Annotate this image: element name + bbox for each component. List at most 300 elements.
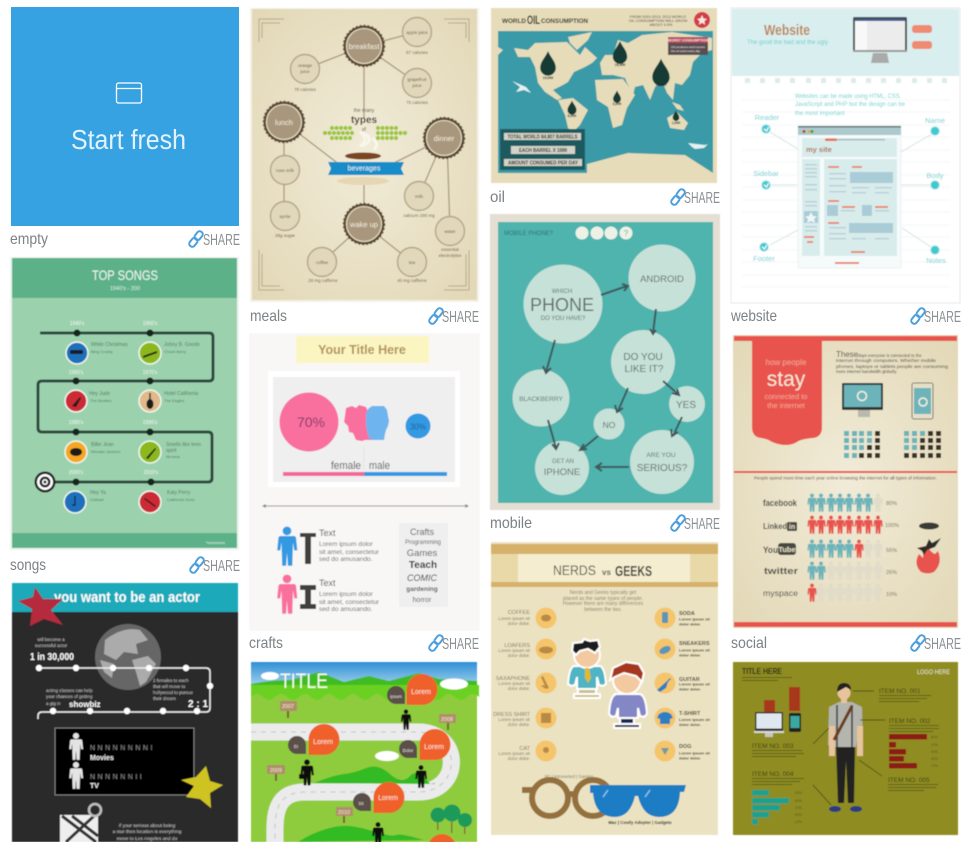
timeline dots and years: 1980's: [69, 420, 84, 426]
figures and lorem text: Text: [319, 528, 336, 538]
small drink circles: [270, 18, 464, 283]
red bar chart: 80%: [931, 736, 938, 740]
black box: movies and tv: [55, 728, 194, 795]
timeline dots and years: 1950's: [143, 321, 158, 327]
teal bar chart: 50%: [795, 813, 802, 817]
figures and lorem text: sit amet, consectetur: [319, 549, 380, 556]
year signs: [267, 701, 456, 823]
item headings and text: ITEM NO. 005: [888, 777, 930, 784]
road: [251, 732, 451, 842]
teal bar chart: [752, 790, 802, 824]
caption: meals: SHARE: [442, 309, 479, 326]
intro text: Nerds and Geeks typically get: [570, 590, 637, 596]
actor stats text: hollywood to pursue: [153, 690, 194, 695]
song captions: Hey Ya: [90, 490, 106, 496]
centre title and beverage cup: types: [351, 115, 377, 126]
red banner: stay: [767, 368, 806, 391]
lorem bubbles: Sit: [358, 801, 364, 806]
caption: crafts: [249, 634, 479, 653]
left item labels: dolor dolor.: [508, 653, 530, 658]
small drink circles: juice: [411, 83, 422, 88]
world map: [498, 32, 713, 173]
social logos: twitter: [764, 566, 798, 577]
heading: actor: you want to be an actor: [54, 589, 200, 606]
song captions: California Gurls: [167, 497, 195, 502]
caption: crafts: crafts: [249, 635, 283, 652]
song captions: Johny B. Goode: [164, 342, 200, 348]
year signs: 2009: [270, 768, 282, 774]
lorem bubbles: Lorem: [411, 689, 431, 696]
right item labels: [679, 611, 711, 760]
percentages: 80%: [886, 501, 897, 507]
callout labels: Footer: [753, 254, 775, 263]
teal bar chart: 80%: [795, 799, 802, 803]
panel: songs: [10, 257, 239, 550]
dotted route: [36, 665, 213, 719]
flowchart circles: [512, 244, 705, 495]
actor location text: if your serious about being: [119, 823, 175, 829]
panel: oil: 19,000: [543, 76, 553, 80]
intro paragraph: the most important: [795, 111, 845, 117]
heading: title: TITLE: [280, 670, 328, 693]
caption: social: social: [731, 635, 767, 652]
black box: movies and tv: NNNNNNNNI: [90, 745, 155, 752]
right item labels: Lorem ipsum sit: [679, 648, 711, 652]
blue sunglasses: [590, 785, 686, 817]
right item labels: GUITAR: [679, 677, 700, 683]
right item labels: DOG: [679, 744, 692, 750]
left item labels: Lorem ipsum sit: [498, 648, 531, 653]
figures and lorem text: Lorem ipsum dolor: [319, 591, 374, 598]
caption: oil: oil: [490, 189, 505, 206]
left item labels: [493, 610, 531, 761]
small drink circles: 87 calories: [406, 50, 429, 55]
flowchart labels: PHONE: [530, 295, 594, 315]
small drink circles: apple juice: [406, 30, 428, 35]
red banner: the internet: [767, 401, 806, 410]
left item labels: LOAFERS: [504, 643, 530, 649]
word cloud: Teach: [409, 560, 437, 571]
word cloud: Crafts: [410, 527, 434, 537]
actor stats text: successful actor: [35, 643, 68, 648]
nerd character: [568, 639, 606, 698]
red bar chart: 70%: [931, 764, 938, 768]
caption: mobile: mobile: [490, 515, 532, 532]
man figure: [828, 683, 863, 812]
song captions: The Beatles: [90, 398, 111, 403]
right item labels: dolor dolor.: [679, 722, 701, 727]
percentages: 26%: [886, 570, 897, 576]
word cloud: Games: [407, 548, 438, 559]
teal bar chart: 10%: [795, 820, 802, 824]
lorem bubbles: Lorem: [313, 739, 333, 746]
browser wireframe: my site: [806, 145, 832, 154]
gender chart: male: [369, 460, 390, 472]
song captions: Hotel California: [164, 391, 198, 397]
tags: [912, 25, 932, 49]
panel: songs: *resources: [206, 540, 225, 545]
devices: [842, 383, 933, 419]
small drink circles: 28 mg caffeine: [308, 278, 338, 283]
right item labels: dolor dolor.: [679, 686, 701, 692]
total stats box: TOTAL WORLD 84,807 BARRELS: [508, 134, 578, 140]
callout labels: Sidebar: [753, 169, 779, 178]
icon: window: [116, 83, 142, 103]
badge: worst consumption: US produces and imports: [671, 45, 705, 49]
lorem bubbles: ipsum: [390, 694, 402, 699]
callout labels: Notes: [926, 256, 946, 265]
panel: website: [731, 8, 960, 303]
small drink circles: 28g sugar: [275, 233, 296, 238]
word cloud: horror: [413, 597, 432, 604]
actor stats text: [30, 637, 208, 710]
caption: website: [730, 307, 961, 326]
word cloud: gardening: [406, 586, 438, 593]
black box: movies and tv: NNNNNNII: [90, 774, 144, 781]
left item labels: COFFEE: [508, 610, 530, 616]
total stats box: [500, 129, 585, 170]
stats intro: People spend more time each year online browsing the internet for all types of information.: [754, 476, 937, 480]
actor stats text: your chances of getting: [46, 694, 93, 699]
song captions: Hey Jude: [89, 391, 110, 397]
panel: meals: [250, 8, 479, 302]
actor stats text: 2 : 1: [188, 699, 208, 710]
timeline dots and years: 2000's: [69, 470, 84, 476]
percentages: 100%: [885, 523, 899, 529]
item headings and text: ITEM NO. 002: [889, 718, 931, 725]
caption: meals: [250, 307, 479, 326]
caption: website: website: [730, 308, 777, 325]
actor location text: a star then location is everything: [113, 829, 182, 835]
red bar chart: 10%: [931, 743, 938, 747]
figures and lorem text: [277, 527, 380, 614]
title banner: [296, 336, 429, 363]
actor stats text: will become a: [37, 637, 65, 642]
right item labels: Lorem ipsum sit: [679, 682, 711, 686]
social logos: in: [789, 524, 795, 531]
intro paragraph: [836, 350, 949, 374]
badge: worst consumption: WORST CONSUMPTION: [668, 38, 709, 42]
total stats box: AMOUNT CONSUMED PER DAY: [508, 160, 578, 166]
caption: empty: empty: [10, 231, 48, 248]
right item labels: Lorem ipsum sit: [679, 616, 711, 622]
song captions: spirit: [166, 448, 177, 454]
small drink circles: grapefruit: [407, 77, 427, 82]
icon: red star: [18, 587, 63, 626]
flowchart labels: SERIOUS?: [637, 463, 688, 474]
caption: meals: meals: [250, 308, 287, 325]
social logos: [763, 498, 799, 598]
song captions: Smells like teen: [166, 442, 201, 448]
panel: oil: 3,000: [613, 102, 621, 106]
red banner: [752, 341, 822, 445]
caption: songs: SHARE: [203, 558, 240, 575]
small drink circles: electrolytes: [439, 253, 462, 258]
left item labels: dolor dolor.: [508, 756, 530, 761]
flowchart labels: LIKE IT?: [625, 364, 664, 375]
mobile header: MOBILE PHONE?: [504, 231, 554, 237]
intro paragraph: days everyone is connected to the: [858, 353, 922, 358]
song captions: Outkast: [90, 497, 105, 502]
actor stats text: showbiz: [69, 700, 101, 709]
intro paragraph: These: [836, 350, 859, 359]
caption: oil: [490, 188, 720, 207]
right item labels: dolor dolor.: [679, 622, 701, 626]
left item labels: SAXAPHONE: [496, 676, 530, 682]
heading: website: The good the bad and the ugly: [747, 39, 829, 46]
left item labels: dolor dolor.: [508, 686, 530, 691]
small drink circles: 75 calories: [406, 100, 429, 105]
social logos: myspace: [763, 589, 799, 598]
figures and lorem text: sed do amusando.: [319, 606, 373, 613]
left item labels: dolor dolor.: [508, 722, 530, 727]
logo text: LOGO HERE: [917, 669, 951, 676]
panel: oil: ABOUT 0.9%: [650, 23, 673, 27]
small drink circles: sprite: [279, 214, 291, 219]
left item labels: dolor dolor.: [508, 621, 530, 626]
timeline dots and years: 2010's: [144, 470, 159, 476]
panel: crafts: [250, 334, 479, 630]
planes: [512, 81, 708, 149]
lorem bubbles: Lorem: [424, 744, 444, 751]
big meal circles: breakfast: [349, 42, 380, 51]
panel: oil: FROM 2010-2013, 2013 WORLD: [630, 15, 686, 19]
target icon: [34, 472, 56, 492]
panel: songs: 1940's - 200: [110, 286, 140, 292]
social logos: Linked: [763, 521, 787, 531]
panel: actor: [12, 583, 238, 842]
panel: mobile: [490, 214, 720, 510]
faint ruled lines: [742, 100, 950, 287]
timeline dots and years: 1990's: [143, 420, 158, 426]
social logos: You: [763, 545, 778, 556]
small drink circles: calcium 290 mg: [403, 213, 435, 218]
actor stats text: 1 in 30,000: [30, 652, 74, 663]
percentages: 10%: [886, 592, 897, 598]
lorem bubbles: Lorem: [378, 795, 398, 802]
centre title and beverage cup: of: [362, 127, 367, 133]
timeline dots and years: [69, 321, 159, 486]
caption: oil: SHARE: [684, 190, 720, 207]
seal: [694, 12, 710, 28]
corner brackets: [259, 19, 469, 290]
flowchart labels: DO YOU HAVE?: [541, 316, 586, 322]
panel: oil: 1,000: [672, 121, 680, 125]
centre title and beverage cup: beverages: [348, 166, 381, 172]
map tag icon: [60, 804, 101, 842]
callout labels: Body: [926, 171, 944, 180]
timeline dots and years: 1970's: [143, 370, 158, 376]
item icons: [539, 612, 673, 755]
flowchart labels: ANDROID: [640, 274, 684, 285]
small drink circles: rose milk: [276, 168, 295, 173]
song icons: [64, 342, 161, 513]
heading: world oil consumption: [502, 13, 588, 27]
social logos: facebook: [763, 498, 798, 509]
caption: social: [731, 634, 961, 653]
hills and clouds: [251, 672, 479, 761]
right item labels: SODA: [679, 611, 695, 617]
year signs: 2008: [441, 717, 453, 723]
actor stats text: their dream: [153, 696, 176, 701]
lorem bubbles: Dolor: [403, 748, 414, 753]
song captions: White Christmas: [91, 342, 128, 348]
timeline path: [38, 333, 213, 482]
caption: mobile: SHARE: [684, 516, 720, 533]
black box: movies and tv: Movies: [90, 755, 114, 762]
intro paragraph: JavaScript and PHP but the design can be: [795, 102, 906, 108]
glasses captions: PC | Introverted | Gaming: [545, 774, 594, 779]
left item labels: Lorem ipsum sit: [498, 751, 531, 756]
gender chart: female: [331, 460, 361, 472]
intro paragraph: phones, laptops or tablets people are consuming: [836, 364, 949, 369]
figures and lorem text: sed do amusando.: [319, 556, 373, 563]
left item labels: DRESS SHIRT: [493, 712, 531, 718]
intro paragraph: Websites can be made using HTML, CSS,: [795, 94, 901, 100]
song captions: Bing Crosby: [91, 349, 113, 354]
check icons: [760, 124, 940, 254]
timeline dots and years: 1960's: [69, 370, 84, 376]
small drink circles: milk: [415, 194, 424, 199]
callout labels: Name: [925, 116, 945, 125]
small drink circles: essential: [441, 247, 459, 252]
title band: [491, 544, 718, 587]
caption: empty: [10, 230, 240, 249]
small drink circles: coffee: [316, 260, 329, 265]
right item labels: Lorem ipsum sit: [679, 750, 711, 756]
big meal circles: wake up: [349, 220, 378, 229]
badge: worst consumption: [668, 37, 709, 55]
heading: title here: TITLE HERE: [742, 666, 782, 676]
heading: world oil consumption: CONSUMPTION: [541, 18, 588, 25]
right item labels: SNEAKERS: [679, 641, 710, 647]
figures and lorem text: Lorem ipsum dolor: [319, 541, 374, 548]
panel: empty: [11, 7, 239, 226]
flowchart arrows: [543, 284, 682, 471]
gender chart: 70%: [297, 414, 325, 430]
panel: road: [251, 662, 479, 842]
dotted row: [745, 78, 947, 83]
caption: crafts: SHARE: [442, 636, 479, 653]
title band: vs: [602, 568, 611, 577]
caption: songs: songs: [10, 557, 46, 574]
item headings and text: ITEM NO. 004: [752, 771, 794, 778]
intro text: [563, 590, 644, 613]
heading: world oil consumption: OIL: [527, 13, 540, 27]
callout labels: Reader: [755, 113, 780, 122]
centre title and beverage cup: the many: [354, 108, 375, 114]
word cloud: [399, 523, 448, 607]
song captions: Chuck Berry: [164, 349, 186, 354]
actor stats text: a gig in: [46, 701, 61, 706]
connector lines: [284, 32, 450, 262]
trees: [430, 804, 472, 834]
small drink circles: orange: [298, 63, 313, 68]
teal bar chart: 70%: [795, 806, 802, 810]
icon: yellow star: [181, 766, 223, 808]
item headings and text: ITEM NO. 001: [879, 688, 921, 695]
mobile header: [504, 226, 632, 240]
small drink circles: juice: [299, 69, 310, 74]
actor location text: move to Los Angeles and do: [117, 836, 178, 842]
panel: title here: [733, 662, 958, 835]
oil drops: [540, 41, 679, 121]
small drink circles: tea: [409, 260, 416, 265]
title band: GEEKS: [615, 563, 652, 580]
timeline dots and years: 1940's: [70, 321, 85, 327]
item headings and text: ITEM NO. 003: [752, 743, 794, 750]
year signs: 2007: [282, 704, 294, 710]
caption: mobile: [490, 514, 720, 533]
monitor: [853, 17, 907, 63]
figures and lorem text: Text: [319, 578, 336, 588]
lorem bubbles: [288, 674, 456, 842]
flowchart labels: DO YOU: [623, 352, 663, 363]
item circles: [536, 608, 676, 762]
actor stats text: 2 females to each: [153, 678, 189, 683]
red bar chart: [889, 734, 938, 768]
panel: oil: 6,000: [568, 114, 576, 118]
panel: nerds vs geeks: Mac | Costly Adopter | Gadgets: [608, 820, 672, 825]
left item labels: Lorem ipsum sit: [498, 717, 531, 722]
intro paragraph: internet through computers. Whether mobile: [836, 358, 937, 363]
right item labels: Lorem ipsum sit: [679, 717, 711, 722]
heading: top songs: TOP SONGS: [92, 267, 158, 283]
intro paragraph: more internet bandwidth globally.: [836, 369, 897, 374]
callout lines: [770, 132, 932, 247]
flowchart labels: [519, 274, 696, 478]
walking figures: [299, 709, 427, 842]
intro text: placed as the same types of people.: [563, 596, 643, 602]
green mounds: [314, 766, 435, 784]
small drink circles: 78 calories: [294, 87, 317, 92]
callout arrows: [813, 691, 885, 805]
panel: oil: OIL CONSUMPTION WILL GROW: [629, 19, 688, 23]
panel: nerds vs geeks: [491, 542, 718, 835]
caption: songs: [10, 556, 240, 575]
red bar chart: 40%: [931, 750, 938, 754]
song captions: [89, 342, 201, 502]
small drink circles: 40 mg caffeine: [397, 278, 427, 283]
actor location text: [113, 823, 182, 842]
globe: [95, 624, 161, 690]
flowchart labels: GET AN: [552, 459, 574, 465]
panel: oil: [491, 8, 717, 183]
social logos: Tube: [778, 545, 796, 554]
device usage grids: [844, 431, 941, 458]
big meal circles: [264, 26, 464, 244]
mobile header: ?: [624, 229, 629, 238]
red banner: how people: [766, 358, 807, 367]
geek character: [609, 662, 647, 728]
left item labels: Lorem ipsum sit: [498, 681, 531, 686]
teal bar chart: 50%: [795, 791, 802, 795]
flowchart labels: WHICH: [552, 289, 572, 295]
song captions: The Eagles: [164, 398, 184, 403]
panel: oil: 20,000: [656, 83, 666, 87]
intro paragraph: [795, 94, 906, 117]
percentages: [885, 501, 899, 598]
red banner: connected to: [765, 392, 807, 401]
song captions: Nirvana: [166, 454, 181, 459]
badge: worst consumption: the oil used every day: [671, 49, 701, 53]
left item labels: CAT: [519, 746, 531, 752]
title band: NERDS: [553, 562, 596, 578]
disc and flame icon: [916, 522, 941, 574]
song captions: Katy Perry: [167, 490, 191, 496]
flowchart labels: IPHONE: [544, 467, 580, 478]
gender chart: [268, 371, 460, 487]
